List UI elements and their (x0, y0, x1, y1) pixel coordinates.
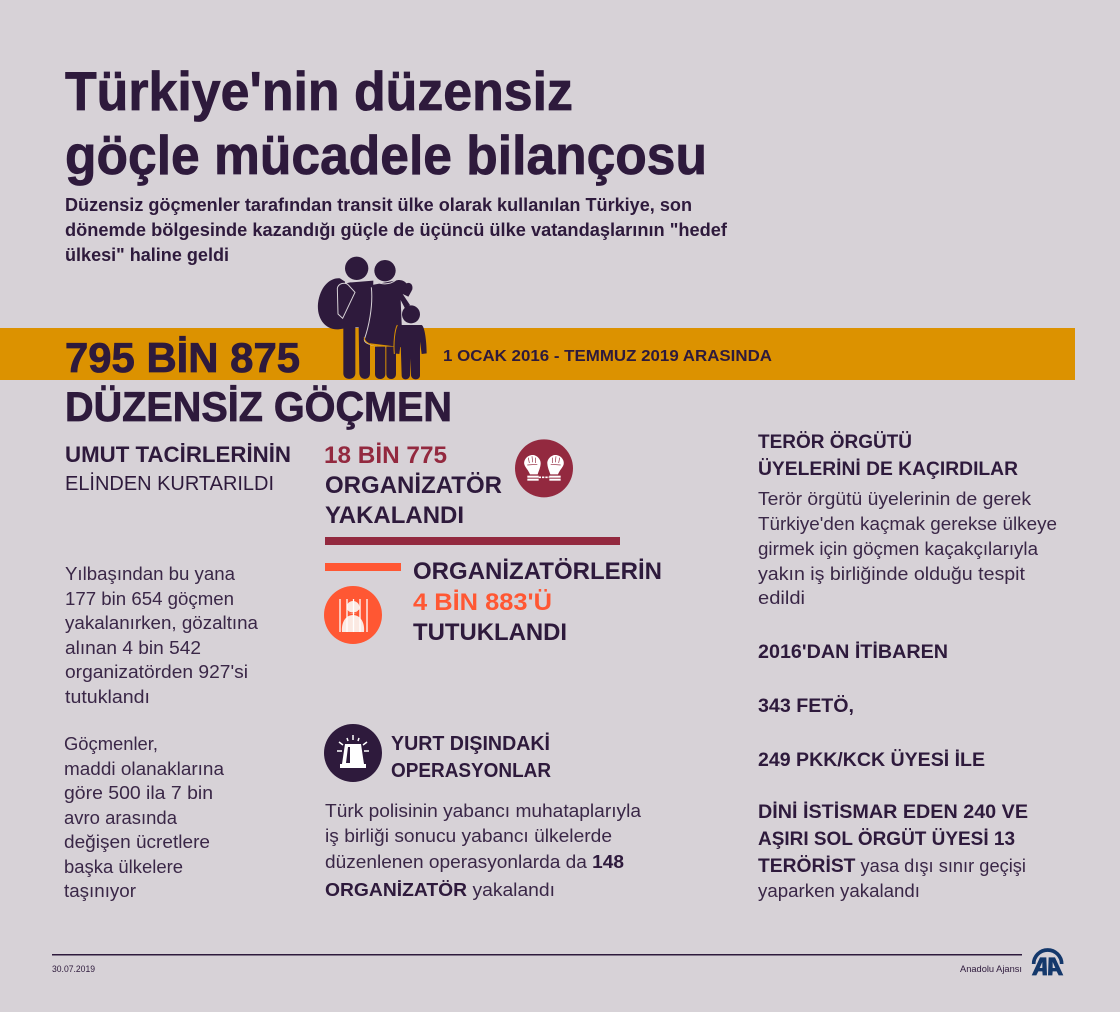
abroad paragraph: ORGANİZATÖR yakalandı (325, 880, 555, 900)
left paragraph 2: maddi olanaklarına (64, 759, 225, 779)
abroad heading (391, 732, 552, 782)
left heading: ELİNDEN KURTARILDI (65, 472, 274, 495)
left heading: UMUT TACİRLERİNİN (65, 442, 291, 467)
orange rule (325, 563, 401, 571)
left heading (65, 442, 291, 495)
jailed organisers: TUTUKLANDI (413, 619, 567, 646)
statistics list (758, 642, 1028, 901)
left paragraph 2: değişen ücretlere (64, 832, 210, 852)
left paragraph 1: tutuklandı (65, 687, 150, 707)
icon: prisoner behind bars (324, 586, 382, 644)
left paragraph 1: organizatörden 927'si (65, 662, 248, 682)
left paragraph 2 (64, 734, 225, 901)
intro text: ülkesi" haline geldi (65, 245, 229, 265)
right heading: ÜYELERİNİ DE KAÇIRDILAR (758, 459, 1018, 480)
date range: 1 OCAK 2016 - TEMMUZ 2019 ARASINDA (443, 348, 772, 365)
orange band (0, 328, 1075, 380)
right paragraph: yakın iş birliğinde olduğu tespit (758, 564, 1025, 584)
caught organisers: ORGANİZATÖR (325, 472, 502, 499)
abroad paragraph: düzenlenen operasyonlarda da 148 (325, 852, 624, 872)
left paragraph 2: taşınıyor (64, 881, 136, 901)
maroon rule (325, 537, 620, 545)
icon: AA logo (1032, 950, 1063, 975)
abroad paragraph (325, 801, 642, 900)
abroad heading: OPERASYONLAR (391, 760, 552, 782)
left paragraph 1: yakalanırken, gözaltına (65, 613, 259, 633)
right paragraph: girmek için göçmen kaçakçılarıyla (758, 539, 1039, 559)
statistics list: yaparken yakalandı (758, 881, 920, 901)
statistics list: AŞIRI SOL ÖRGÜT ÜYESİ 13 (758, 829, 1015, 850)
footer rule (52, 954, 1022, 956)
icon: siren (324, 724, 382, 782)
statistics list: 249 PKK/KCK ÜYESİ İLE (758, 750, 985, 771)
left paragraph 2: avro arasında (64, 808, 178, 828)
abroad heading: YURT DIŞINDAKİ (391, 732, 550, 755)
big label: DÜZENSİZ GÖÇMEN (65, 383, 452, 430)
title (65, 60, 707, 186)
jailed organisers: ORGANİZATÖRLERİN (413, 558, 662, 585)
statistics list: TERÖRİST yasa dışı sınır geçişi (758, 856, 1026, 877)
right paragraph: Türkiye'den kaçmak gerekse ülkeye (758, 514, 1057, 534)
right paragraph: edildi (758, 588, 805, 608)
intro text (65, 195, 728, 265)
title: göçle mücadele bilançosu (65, 124, 707, 186)
right paragraph: Terör örgütü üyelerinin de gerek (758, 489, 1032, 509)
jailed organisers: 4 BİN 883'Ü (413, 589, 552, 616)
icon: family (318, 257, 427, 379)
source: Anadolu Ajansı (960, 964, 1022, 975)
right paragraph (758, 489, 1057, 608)
icon: handcuffed fists (515, 439, 573, 497)
jailed organisers (413, 558, 662, 646)
left paragraph 1: alınan 4 bin 542 (65, 638, 201, 658)
abroad paragraph: iş birliği sonucu yabancı ülkelerde (325, 826, 612, 846)
abroad paragraph: Türk polisinin yabancı muhataplarıyla (325, 801, 642, 821)
caught organisers: YAKALANDI (325, 502, 464, 529)
statistics list: 343 FETÖ, (758, 696, 854, 717)
caught organisers (324, 442, 502, 529)
caught organisers: 18 BİN 775 (324, 442, 447, 469)
right heading (758, 432, 1018, 480)
statistics list: DİNİ İSTİSMAR EDEN 240 VE (758, 802, 1028, 823)
statistics list: 2016'DAN İTİBAREN (758, 642, 948, 663)
left paragraph 2: göre 500 ila 7 bin (64, 783, 213, 803)
left paragraph 2: Göçmenler, (64, 734, 158, 754)
intro text: dönemde bölgesinde kazandığı güçle de üçüncü ülke vatandaşlarının "hedef (65, 220, 728, 240)
left paragraph 1: 177 bin 654 göçmen (65, 589, 234, 609)
big number: 795 BİN 875 (65, 334, 300, 381)
intro text: Düzensiz göçmenler tarafından transit ülke olarak kullanılan Türkiye, son (65, 195, 692, 215)
left paragraph 2: başka ülkelere (64, 857, 183, 877)
left paragraph 1: Yılbaşından bu yana (65, 564, 236, 584)
title: Türkiye'nin düzensiz (65, 60, 573, 122)
left paragraph 1 (65, 564, 259, 707)
right heading: TERÖR ÖRGÜTÜ (758, 432, 912, 453)
date: 30.07.2019 (52, 964, 95, 975)
